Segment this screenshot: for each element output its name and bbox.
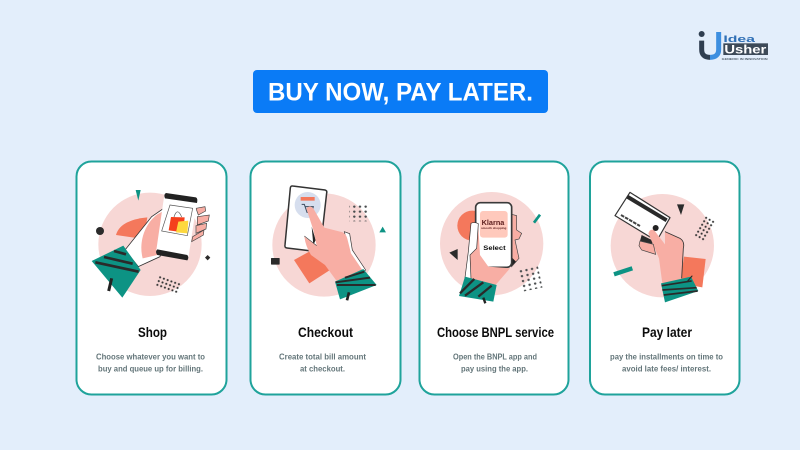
description: Pay later	[610, 352, 723, 374]
panel: shop	[76, 162, 226, 394]
illustration: hand holding phone with Klarna: smooth shopping	[481, 226, 507, 230]
logo: Idea Usher: Usher	[724, 43, 767, 57]
panel: pay later	[590, 162, 740, 394]
panel: checkout	[250, 162, 400, 394]
description: Pay later: avoid late fees/ interest.	[622, 364, 711, 374]
heading: Checkout: Checkout	[298, 324, 353, 340]
description: Shop: buy and queue up for billing.	[98, 364, 203, 374]
logo: Idea Usher: GENERIC IN INNOVATION	[722, 57, 768, 61]
illustration: hand holding phone with shopping bags	[92, 190, 210, 298]
heading: Shop: Shop	[138, 324, 167, 340]
illustration: hand holding phone with Klarna	[440, 192, 543, 303]
description: Choose BNPL service: pay using the app.	[461, 364, 528, 374]
description: Checkout: at checkout.	[300, 364, 345, 374]
logo: Idea Usher	[699, 31, 768, 61]
illustration: hand holding phone with Klarna: Select	[483, 245, 507, 252]
title banner: BUY NOW, PAY LATER.	[268, 78, 533, 106]
heading: Pay later: Pay later	[642, 324, 692, 340]
logo: Idea Usher: Idea	[723, 34, 756, 44]
illustration: finger tapping cart on phone	[271, 186, 386, 300]
panel: choose BNPL service	[420, 162, 568, 394]
illustration: hand holding phone with Klarna: Klarna	[482, 218, 505, 227]
description: Choose BNPL service	[453, 352, 537, 374]
title banner	[253, 70, 548, 113]
description: Pay later: pay the installments on time to	[610, 352, 723, 362]
description: Checkout: Create total bill amount	[279, 352, 366, 362]
description: Checkout	[279, 352, 366, 374]
description: Shop: Choose whatever you want to	[96, 352, 205, 362]
description: Shop	[96, 352, 205, 374]
heading: Choose BNPL service: Choose BNPL service	[437, 324, 554, 340]
illustration: hand holding credit card	[611, 192, 716, 302]
description: Choose BNPL service: Open the BNPL app and	[453, 352, 537, 362]
